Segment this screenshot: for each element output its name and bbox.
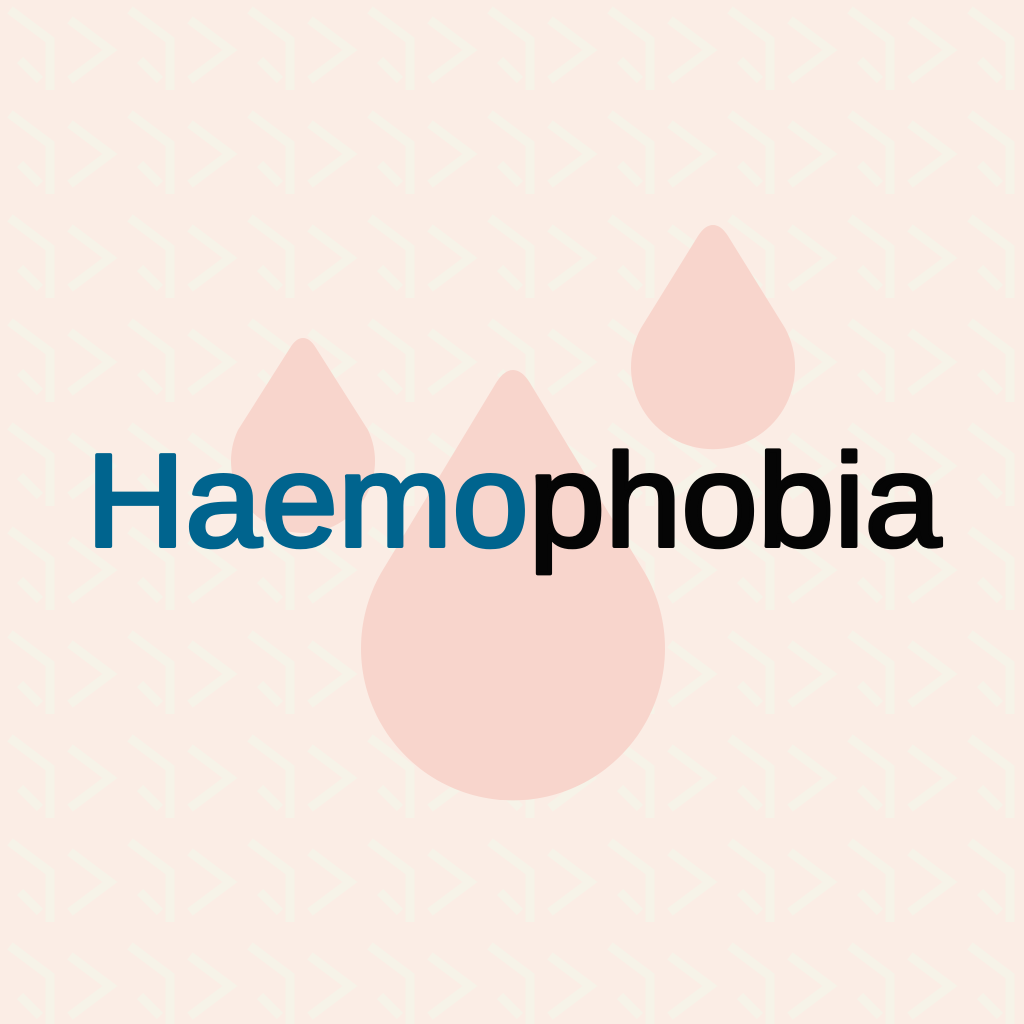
- icon: right drop: [631, 225, 795, 449]
- title: Haemophobia: [86, 427, 942, 574]
- icon: small left drop: [231, 338, 375, 533]
- icon: large center drop: [361, 370, 665, 800]
